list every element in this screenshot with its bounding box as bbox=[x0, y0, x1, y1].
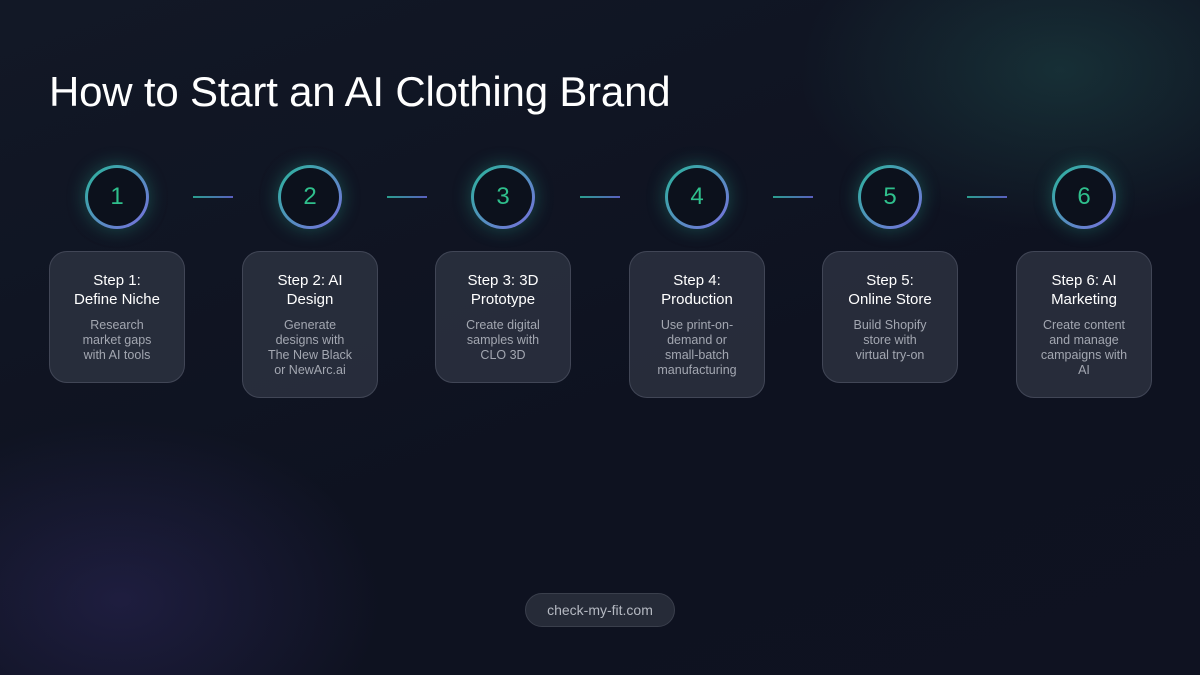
card: step 6: Marketing bbox=[1051, 291, 1117, 308]
card: step 4: manufacturing bbox=[657, 363, 737, 377]
step 5 circle: 5 bbox=[883, 183, 897, 210]
card: step 5: Build Shopify bbox=[854, 318, 926, 332]
card: step 1 bbox=[49, 251, 185, 383]
card: step 6 bbox=[1016, 251, 1152, 398]
card: step 5: Step 5: bbox=[866, 272, 914, 289]
card: step 4: Production bbox=[661, 291, 733, 308]
card: step 1: with AI tools bbox=[84, 348, 150, 362]
card: step 3: Prototype bbox=[471, 291, 535, 308]
step 1 circle: 1 bbox=[110, 183, 124, 210]
connector 2 bbox=[387, 196, 427, 198]
card: step 5 bbox=[822, 251, 958, 383]
title: How to Start an AI Clothing Brand bbox=[49, 68, 670, 115]
step 4 circle: 4 bbox=[690, 183, 704, 210]
card: step 2: Design bbox=[287, 291, 333, 308]
card: step 2: designs with bbox=[276, 333, 344, 347]
card: step 4: Step 4: bbox=[673, 272, 721, 289]
card: step 2 bbox=[242, 251, 378, 398]
step 5 circle bbox=[858, 165, 922, 229]
card: step 1: Research bbox=[90, 318, 144, 332]
connector 5 bbox=[967, 196, 1007, 198]
footer pill bbox=[525, 593, 675, 627]
card: step 3: samples with bbox=[467, 333, 539, 347]
card: step 6: Create content bbox=[1043, 318, 1125, 332]
card: step 5: store with bbox=[863, 333, 917, 347]
card: step 1: Step 1: bbox=[93, 272, 141, 289]
step 1 circle bbox=[85, 165, 149, 229]
footer pill: check-my-fit.com bbox=[547, 602, 653, 618]
card: step 4 bbox=[629, 251, 765, 398]
connector 1 bbox=[193, 196, 233, 198]
card: step 1: market gaps bbox=[83, 333, 151, 347]
card: step 2: The New Black bbox=[268, 348, 352, 362]
step 2 circle bbox=[278, 165, 342, 229]
step 3 circle: 3 bbox=[496, 183, 510, 210]
card: step 4: demand or bbox=[667, 333, 727, 347]
card: step 2: or NewArc.ai bbox=[274, 363, 346, 377]
connector 4 bbox=[773, 196, 813, 198]
card: step 1: Define Niche bbox=[74, 291, 160, 308]
card: step 3: Step 3: 3D bbox=[468, 272, 538, 289]
card: step 5: Online Store bbox=[848, 291, 932, 308]
card: step 3 bbox=[435, 251, 571, 383]
step 6 circle: 6 bbox=[1077, 183, 1091, 210]
card: step 4: small-batch bbox=[665, 348, 729, 362]
card: step 3: CLO 3D bbox=[480, 348, 526, 362]
card: step 6: and manage bbox=[1049, 333, 1119, 347]
step 3 circle bbox=[471, 165, 535, 229]
card: step 2: Step 2: AI bbox=[277, 272, 343, 289]
step 4 circle bbox=[665, 165, 729, 229]
card: step 6: AI bbox=[1078, 363, 1090, 377]
step 2 circle: 2 bbox=[303, 183, 317, 210]
card: step 3: Create digital bbox=[466, 318, 540, 332]
step 6 circle bbox=[1052, 165, 1116, 229]
card: step 5: virtual try-on bbox=[856, 348, 924, 362]
connector 3 bbox=[580, 196, 620, 198]
card: step 2: Generate bbox=[284, 318, 336, 332]
card: step 4: Use print-on- bbox=[661, 318, 733, 332]
card: step 6: Step 6: AI bbox=[1051, 272, 1117, 289]
card: step 6: campaigns with bbox=[1041, 348, 1127, 362]
